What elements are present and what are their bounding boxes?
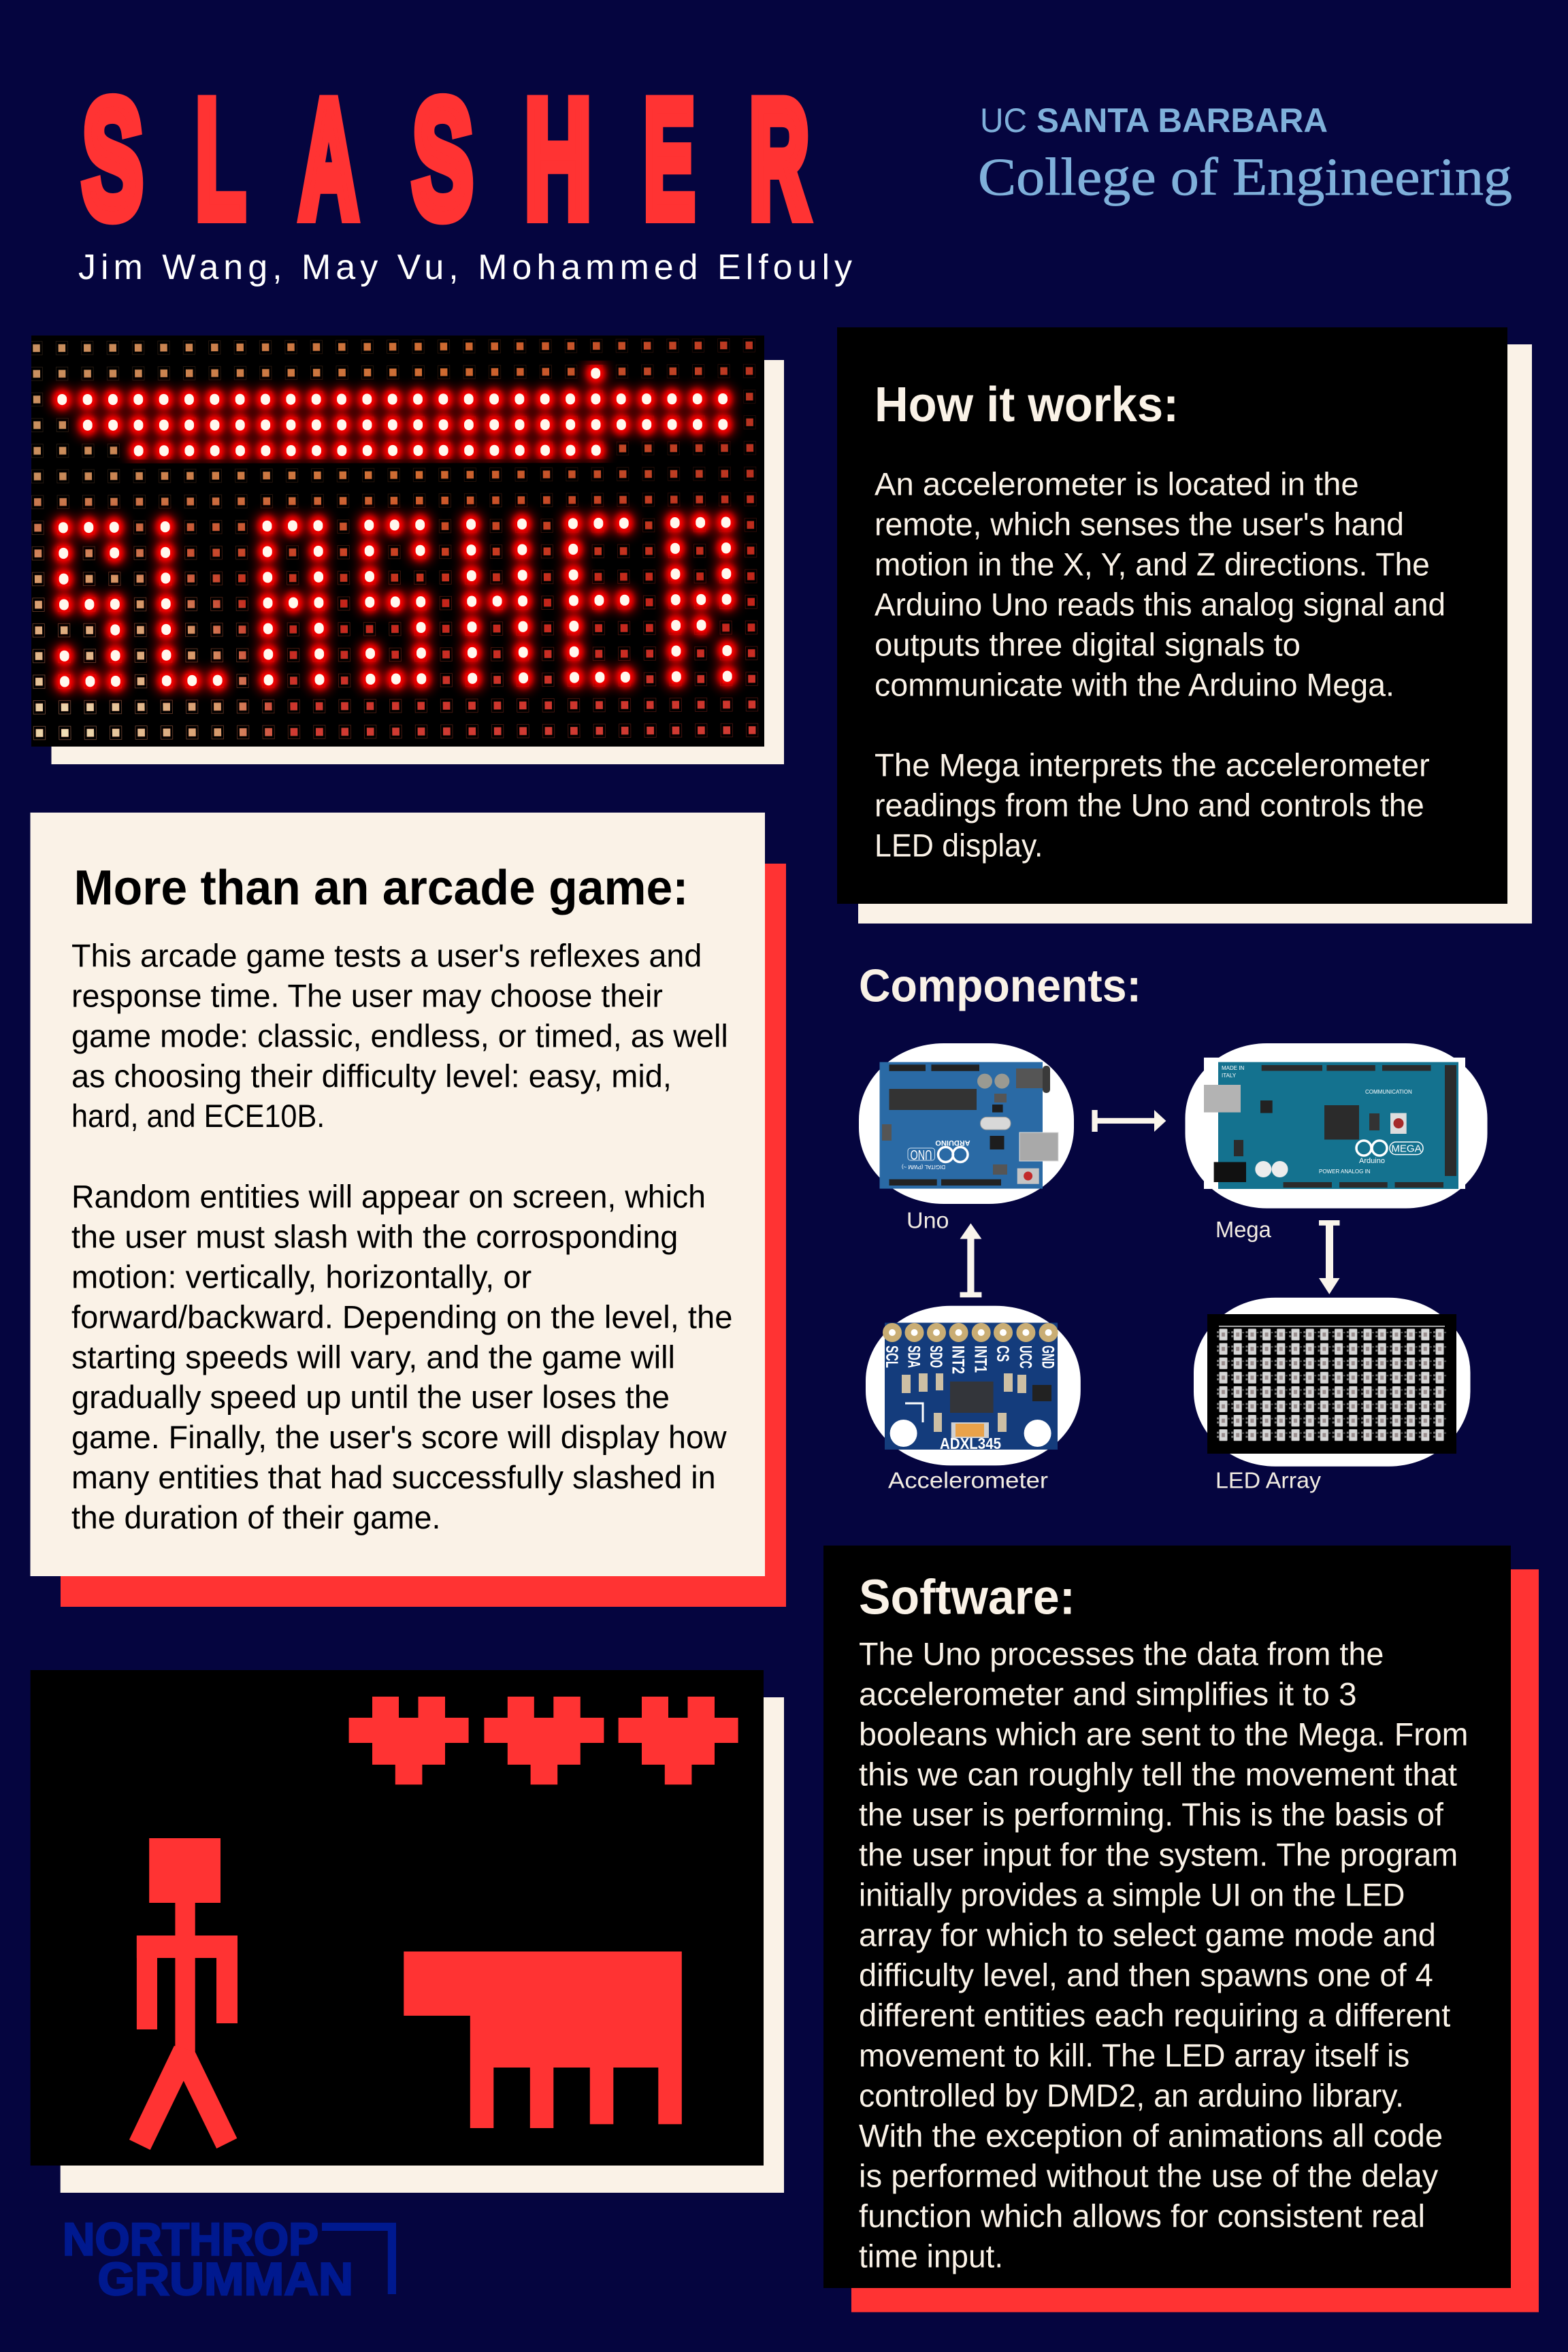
text: software description: different entities each requiring a different [859,1997,1450,2033]
text: how it works body: The Mega interprets the accelerometer [875,747,1430,783]
arrow: accelerometer to Uno [960,1224,981,1297]
text: how it works body: remote, which senses the user's hand [875,506,1404,542]
component: accelerometer: UCC [1015,1345,1034,1369]
label: Uno: Uno [906,1207,949,1232]
text: game description: as choosing their difficulty level: easy, mid, [71,1058,672,1094]
label: Mega: Mega [1215,1217,1271,1242]
text: software description: controlled by DMD2, an arduino library. [859,2077,1404,2113]
label: accelerometer: Accelerometer [888,1467,1048,1493]
text: game description: the user must slash with the corrosponding [71,1219,678,1255]
text: game description: forward/backward. Depending on the level, the [71,1298,732,1335]
text: game description: This arcade game tests a user's reflexes and [71,938,702,974]
component: Mega: ANALOG IN [1341,1169,1371,1175]
text: how it works body: outputs three digital signals to [875,626,1301,663]
heading: components: Components: [859,960,1141,1011]
text: game description: game. Finally, the user's score will display how [71,1419,728,1455]
component: LED array [1194,1298,1470,1467]
component: accelerometer [866,1306,1081,1465]
panel: software [823,1546,1539,2313]
component: accelerometer: ADXL345 [940,1435,1001,1452]
text: R [749,65,809,252]
component: Mega [1186,1043,1488,1209]
text: game description: hard, and ECE10B. [71,1098,325,1134]
title: L [196,65,245,252]
text: software description: this we can roughly tell the movement that [859,1756,1457,1792]
text: how it works body: motion in the X, Y, and Z directions. The [875,546,1430,582]
component: accelerometer: SCL [882,1345,901,1368]
text: game description: game mode: classic, endless, or timed, as well [71,1017,728,1054]
text: software description: the user is performing. This is the basis of [859,1796,1444,1832]
text: software description: accelerometer and simplifies it to 3 [859,1676,1357,1712]
heading: software: Software: [859,1571,1075,1625]
lit LEDs: score text [63,521,728,683]
icon: stick figure [129,1838,238,2150]
authors: Jim Wang, May Vu, Mohammed Elfouly [78,248,852,287]
component: accelerometer: GND [1039,1345,1058,1369]
component: accelerometer: CS [993,1345,1012,1362]
component: Mega: ITALY [1222,1073,1237,1079]
logo: UC Santa Barbara College of Engineering: College of Engineering [978,147,1512,206]
text: software description: movement to kill. The LED array itself is [859,2037,1409,2073]
title: E [644,65,695,252]
title [82,65,809,252]
text: game description: motion: vertically, horizontally, or [71,1259,532,1294]
title: H [525,65,591,252]
text: game description [71,938,732,1535]
icon: three pixel hearts [349,1697,738,1784]
heading: more than an arcade game: More than an arcade game: [74,861,689,915]
unlit LEDs [31,338,758,740]
text: software description: With the exception of animations all code [859,2117,1443,2153]
text: how it works body [875,466,1446,864]
text: game description: gradually speed up until the user loses the [71,1379,670,1415]
text: how it works body: An accelerometer is located in the [875,466,1359,502]
arrow: Mega to LED array [1319,1220,1339,1294]
lit LEDs: top bar [62,372,723,452]
text: game description: many entities that had successfully slashed in [71,1459,716,1495]
text: software description: function which allows for consistent real [859,2198,1425,2234]
label: LED array: LED Array [1215,1467,1322,1493]
component: Mega: Arduino [1359,1157,1385,1165]
text: how it works body: readings from the Uno and controls the [875,787,1424,823]
text: software description: difficulty level, and then spawns one of 4 [859,1957,1433,1993]
text: software description: the user input for the system. The program [859,1836,1458,1872]
component: Mega: COMMUNICATION [1365,1089,1412,1095]
title: S [82,65,143,252]
text: game description: response time. The user may choose their [71,977,663,1014]
text: software description: initially provides a simple UI on the LED [859,1876,1405,1912]
component: Mega: MADE IN [1222,1065,1245,1071]
text: game description: starting speeds will vary, and the game will [71,1339,675,1375]
title: S [412,65,473,252]
logo: UC Santa Barbara College of Engineering [978,101,1512,206]
component: Mega: MEGA [1391,1143,1422,1154]
heading: how it works: How it works: [875,378,1179,432]
panel: more than an arcade game [30,813,786,1607]
text: game description: Random entities will appear on screen, which [71,1179,706,1215]
arrow: Uno to Mega [1092,1110,1166,1132]
component: accelerometer: SDA [904,1345,923,1368]
text: game description: the duration of their game. [71,1499,440,1535]
text: how it works body: LED display. [875,828,1043,864]
logo: UC Santa Barbara College of Engineering: UC [980,101,1027,140]
text: how it works body: communicate with the Arduino Mega. [875,667,1394,702]
logo: Northrop Grumman [63,2213,396,2305]
component: Uno: ARDUINO [935,1139,970,1147]
component: Uno: DIGITAL (PWM ~) [902,1164,945,1170]
component: accelerometer: INT2 [949,1345,968,1374]
text: software description: time input. [859,2238,1003,2274]
text: how it works body: Arduino Uno reads this analog signal and [875,586,1446,622]
text: software description: booleans which are sent to the Mega. From [859,1716,1468,1752]
logo: Northrop Grumman: NORTHROP [63,2213,318,2265]
title: A [299,65,358,252]
panel: LED photo [31,336,784,764]
text: software description: The Uno processes the data from the [859,1635,1384,1671]
panel: game screen [31,1670,784,2193]
component: Mega: POWER [1319,1169,1339,1175]
panel: how it works [837,327,1532,924]
component: Uno [859,1043,1074,1204]
text: software description: array for which to select game mode and [859,1916,1436,1953]
text: software description: is performed without the use of the delay [859,2157,1439,2193]
component: accelerometer: INT1 [971,1345,990,1373]
component: accelerometer: SDO [926,1345,945,1368]
icon: entity creature [404,1952,682,2128]
component: Uno: UNO [911,1147,932,1162]
text: software description [859,1635,1468,2274]
logo: Northrop Grumman: GRUMMAN [98,2253,353,2305]
logo: UC Santa Barbara College of Engineering: SANTA BARBARA [1036,101,1328,140]
